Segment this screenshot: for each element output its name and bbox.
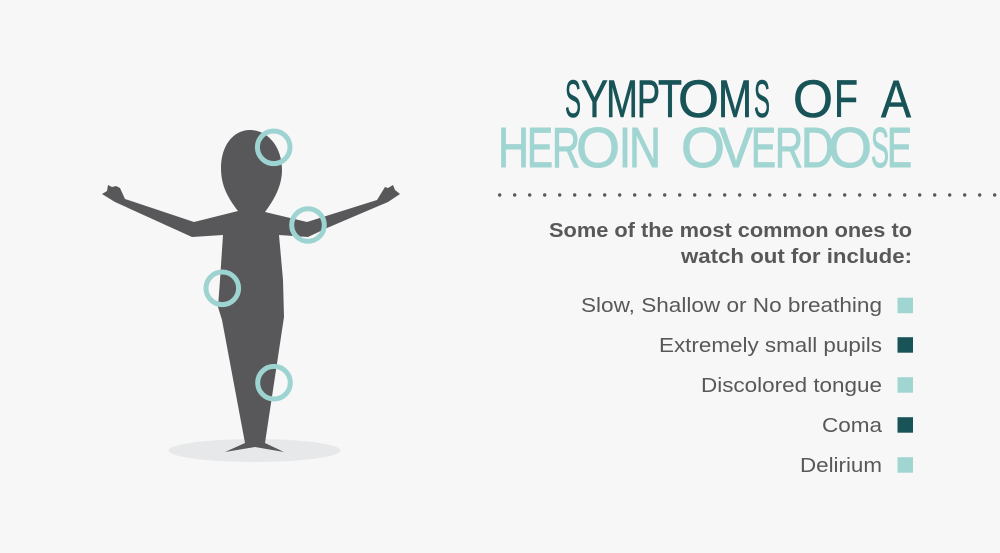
title line two: I bbox=[619, 116, 631, 180]
marker ring: waist bbox=[206, 272, 239, 305]
title line one: S bbox=[754, 70, 770, 129]
title line two: R bbox=[552, 116, 580, 180]
title line two: O bbox=[576, 116, 620, 180]
title line one: S bbox=[565, 70, 581, 129]
symptom: coma bbox=[822, 415, 913, 437]
marker ring: head bbox=[257, 131, 290, 164]
title line two: H bbox=[498, 116, 529, 180]
intro text: watch out for include: bbox=[680, 246, 912, 268]
marker ring: shoulder bbox=[292, 209, 324, 241]
title line one: Y bbox=[581, 70, 608, 129]
title line two: E bbox=[887, 116, 912, 180]
title line one: O bbox=[678, 70, 719, 129]
title line two: V bbox=[719, 116, 753, 180]
intro text: Some of the most common ones to bbox=[549, 220, 912, 242]
marker ring: leg bbox=[258, 366, 290, 399]
title line two: S bbox=[871, 116, 889, 180]
symptom list bbox=[581, 295, 913, 477]
symptom: slow breathing: Slow, Shallow or No breathing bbox=[581, 295, 882, 317]
symptom: delirium: Delirium bbox=[800, 455, 882, 477]
human silhouette bbox=[102, 130, 400, 452]
title line two: D bbox=[801, 116, 834, 180]
symptom: coma: Coma bbox=[822, 415, 883, 437]
title line one: M bbox=[606, 70, 638, 129]
symptom: small pupils: Extremely small pupils bbox=[659, 335, 882, 357]
title line one: T bbox=[658, 70, 682, 129]
illustration: human figure with symptom markers bbox=[102, 130, 400, 462]
title line two: O bbox=[681, 116, 725, 180]
title line one: A bbox=[881, 70, 912, 129]
title line two: E bbox=[751, 116, 776, 180]
title line one: F bbox=[834, 70, 858, 129]
symptom: discolored tongue: Discolored tongue bbox=[701, 375, 882, 397]
symptom: delirium bbox=[800, 455, 913, 477]
title line two: N bbox=[629, 116, 661, 180]
title line one: P bbox=[637, 70, 660, 129]
title line one: O bbox=[793, 70, 833, 129]
title line two: O bbox=[828, 116, 872, 180]
title line one: M bbox=[718, 70, 752, 129]
title line two: E bbox=[527, 116, 553, 180]
figure ground shadow bbox=[168, 439, 340, 462]
intro text bbox=[549, 220, 912, 268]
title line two: R bbox=[775, 116, 803, 180]
title bbox=[498, 70, 912, 180]
